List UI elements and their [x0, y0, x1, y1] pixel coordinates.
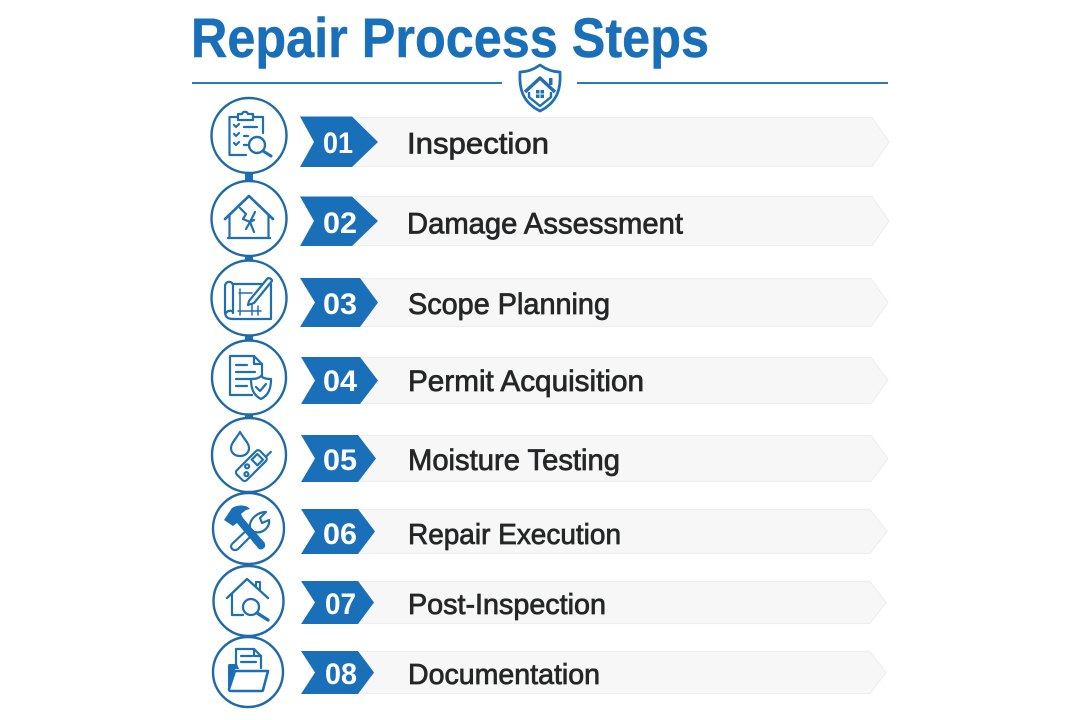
step 6: Repair Execution	[213, 493, 887, 564]
step 3 number badge: 03	[323, 288, 357, 321]
step 6 number badge: 06	[323, 518, 357, 551]
step 1 circle	[212, 98, 286, 173]
step 1 number badge	[300, 116, 378, 167]
step 3 circle	[212, 260, 286, 336]
step 3: Scope Planning	[212, 260, 888, 336]
step 3 number badge	[300, 278, 378, 327]
step 1: Inspection	[212, 98, 889, 173]
step 8 number badge	[301, 651, 374, 694]
step 5 number badge: 05	[323, 444, 357, 477]
icon: water drop and moisture meter	[231, 432, 273, 482]
step 6 number badge	[301, 509, 375, 554]
step 3 bar	[360, 278, 888, 326]
step 7 label: Post-Inspection	[408, 589, 606, 621]
title: Repair Process Steps	[191, 6, 709, 69]
icon: house with magnifier	[227, 579, 268, 620]
step 8 circle	[213, 637, 283, 707]
step 1 number badge: 01	[323, 127, 353, 160]
step 4 bar	[360, 358, 888, 404]
step 3 label: Scope Planning	[408, 288, 610, 321]
icon: house shield	[520, 65, 560, 111]
icon: document with shield	[230, 356, 271, 399]
step 5: Moisture Testing	[212, 418, 888, 492]
step 4: Permit Acquisition	[212, 340, 888, 414]
step 4 circle	[212, 340, 286, 414]
icon: wrench	[231, 512, 269, 550]
step 2 label: Damage Assessment	[407, 208, 684, 240]
step 7 circle	[214, 566, 284, 636]
step 8 number badge: 08	[325, 658, 357, 691]
step 4 label: Permit Acquisition	[408, 365, 644, 398]
step 8: Documentation	[213, 637, 886, 707]
icon: clipboard with magnifier	[230, 112, 271, 156]
step 6 bar	[358, 510, 887, 554]
step 4 number badge: 04	[323, 365, 357, 398]
timeline connectors	[245, 171, 253, 639]
icon: blueprint and pencil	[225, 278, 272, 319]
icon: hammer	[224, 505, 265, 549]
step 2 bar	[352, 196, 889, 246]
step 8 label: Documentation	[408, 659, 600, 691]
step 2 circle	[212, 181, 286, 256]
step 2 number badge	[300, 196, 378, 246]
title divider with shield icon	[192, 65, 888, 111]
step 2 number badge: 02	[323, 207, 357, 240]
step 7: Post-Inspection	[214, 566, 886, 636]
icon: hammer and wrench	[224, 505, 269, 550]
step 7 number badge: 07	[325, 588, 356, 621]
step 8 bar	[358, 652, 886, 694]
step 5 label: Moisture Testing	[408, 444, 620, 477]
step 5 bar	[358, 436, 888, 482]
step 1 label: Inspection	[407, 128, 549, 160]
icon: cracked house	[225, 196, 273, 238]
step 6 circle	[213, 493, 284, 564]
step 1 bar	[352, 118, 889, 166]
step 4 number badge	[301, 357, 378, 404]
icon: folder with document	[228, 649, 268, 691]
step 5 circle	[212, 418, 286, 492]
step 5 number badge	[301, 435, 376, 482]
step 6 label: Repair Execution	[408, 519, 621, 551]
step 7 number badge	[301, 581, 374, 624]
step 7 bar	[358, 582, 886, 624]
step 2: Damage Assessment	[212, 181, 889, 256]
